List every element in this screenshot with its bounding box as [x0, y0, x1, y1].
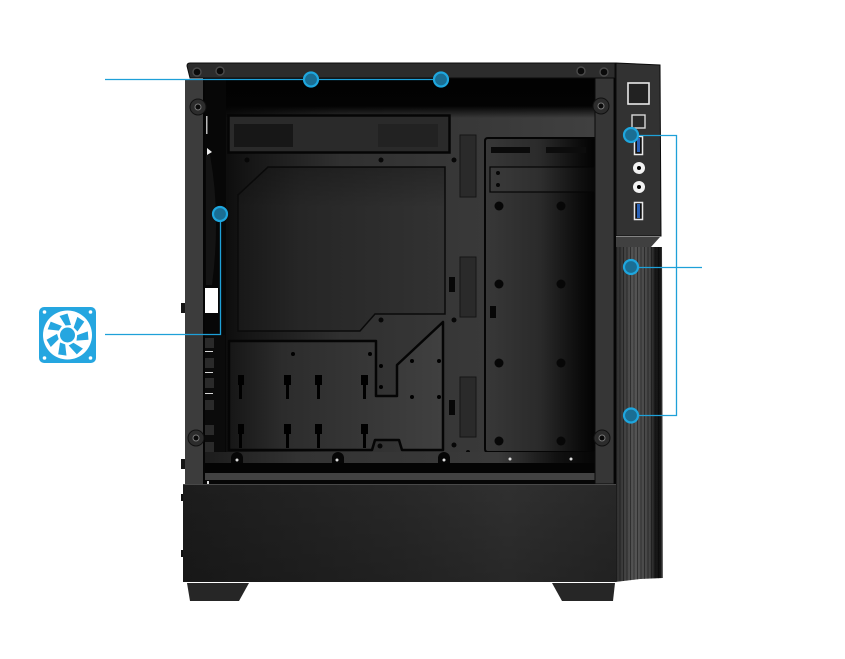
small hardware holes: [244, 158, 470, 454]
icon: fan: [39, 307, 96, 363]
case body: [181, 63, 663, 601]
hotspot: front lower: [624, 408, 638, 422]
leader line: side fan: [105, 214, 220, 334]
hotspot: front upper: [624, 128, 638, 142]
USB port top: [634, 136, 642, 154]
audio jacks: [633, 162, 645, 193]
upper bay frame: [228, 116, 450, 152]
leader line: top: [105, 78, 441, 80]
hotspot: top fan 2: [434, 72, 448, 86]
left cavity with side fan: [204, 78, 226, 484]
black top cavity: [204, 78, 596, 118]
reset button: [632, 115, 645, 128]
ribbed front bezel: [614, 78, 663, 582]
hotspot: front middle: [624, 260, 638, 274]
motherboard cutout: [238, 167, 445, 331]
leader line: front bracket: [631, 136, 702, 416]
front IO panel: [616, 63, 661, 236]
bottom panel: [181, 484, 616, 582]
vertical slots: [460, 135, 476, 437]
right frame pillar: [595, 78, 614, 484]
left frame pillar: [181, 78, 205, 484]
hotspot: top fan 1: [304, 72, 318, 86]
power button: [628, 83, 649, 104]
rubber grommets: [188, 98, 610, 446]
hotspot: side fan: [213, 207, 227, 221]
interior back wall: [204, 78, 596, 484]
right drive panel: [485, 138, 596, 452]
feet: [187, 583, 615, 601]
lower power supply cutout: [229, 322, 443, 450]
USB port bottom: [634, 202, 642, 220]
top frame rail: [187, 63, 615, 78]
bottom bays and shelf: [203, 452, 596, 484]
